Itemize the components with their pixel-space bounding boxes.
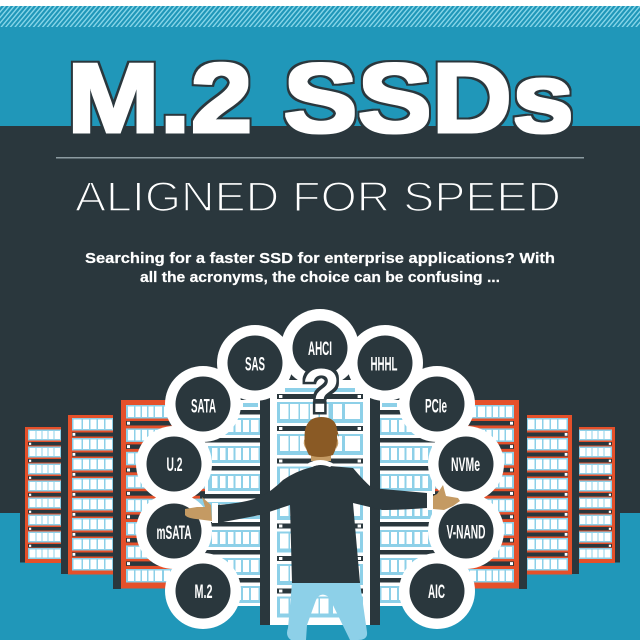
- background: blue floor: [0, 513, 640, 640]
- bubble: NVMe: [438, 436, 494, 492]
- subtitle: ALIGNED FOR SPEED: [75, 173, 561, 220]
- bubble: NVMe: NVMe: [451, 455, 480, 476]
- intro text: all the acronyms, the choice can be confusing ...: [140, 270, 500, 286]
- left hand: [185, 497, 212, 521]
- title: M.2 SSDs: [67, 43, 574, 153]
- suit jacket: [218, 465, 427, 583]
- bubble: mSATA: [146, 504, 202, 558]
- person seen from behind: [185, 417, 460, 640]
- bubble: mSATA: mSATA: [156, 523, 192, 544]
- right hand: [433, 485, 460, 510]
- intro text: [85, 251, 555, 286]
- background: blue header: [0, 27, 640, 127]
- ears: [304, 438, 338, 449]
- background: white top edge: [0, 0, 640, 7]
- bubble: M.2: M.2: [194, 582, 212, 603]
- right cuff: [427, 493, 433, 510]
- bubble: SAS: [228, 336, 282, 390]
- divider line: [56, 157, 584, 158]
- background: striped band: [0, 6, 640, 27]
- background: dark panel: [0, 126, 640, 514]
- bubble: U.2: [146, 436, 202, 492]
- left cuff: [212, 503, 218, 523]
- bubble: AIC: [410, 564, 464, 618]
- central server rack: [270, 380, 370, 625]
- bubble: AHCI: [292, 320, 348, 376]
- neck: [311, 450, 331, 461]
- bubble: HHHL: HHHL: [370, 354, 398, 376]
- server racks left: [20, 400, 270, 625]
- intro text: Searching for a faster SSD for enterprise applications? With: [85, 251, 555, 267]
- server racks right: [370, 400, 620, 625]
- hair: [304, 417, 339, 457]
- bubble: AIC: AIC: [428, 582, 445, 603]
- bubble: SATA: SATA: [191, 396, 216, 418]
- bubble: AHCI: AHCI: [308, 339, 332, 360]
- bubble: PCIe: PCIe: [425, 396, 447, 418]
- trousers: [287, 583, 367, 640]
- bubble: V-NAND: [438, 504, 494, 558]
- bubble: U.2: U.2: [166, 455, 182, 476]
- bubble: SAS: SAS: [245, 354, 265, 376]
- white ring of acronym bubbles: [136, 309, 504, 629]
- bubble: SATA: [176, 376, 230, 432]
- bubble: HHHL: [358, 336, 412, 390]
- bubble: PCIe: [410, 376, 464, 432]
- bubble: M.2: [176, 564, 230, 618]
- bubble: V-NAND: V-NAND: [446, 522, 486, 544]
- icon: question mark: ?: [302, 357, 340, 426]
- shirt collar: [307, 460, 334, 467]
